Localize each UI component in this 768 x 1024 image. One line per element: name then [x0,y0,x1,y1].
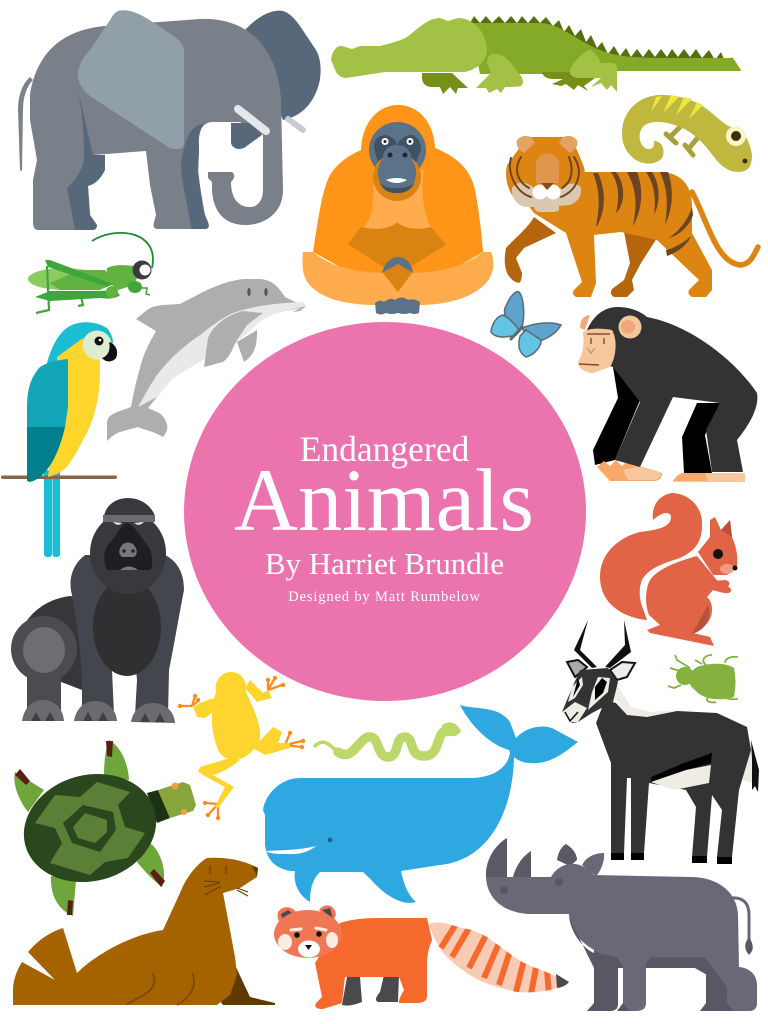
icon: gorilla [11,498,184,723]
icon: macaw [1,322,117,557]
designer credit: Designed by Matt Rumbelow [288,589,481,605]
heading: Endangered: Endangered [300,429,470,469]
title: Animals: Animals [234,452,534,550]
icon: turtle [12,740,196,916]
icon: snake [315,722,461,757]
icon: antelope [562,620,759,864]
icon: beetle [668,655,738,702]
icon: gecko [622,95,752,172]
icon: orangutan [302,105,493,314]
icon: butterfly [491,292,561,357]
icon: frog [178,672,305,820]
icon: whale [263,705,578,903]
icon: crocodile [331,16,741,94]
orangutan face [369,122,426,201]
icon: red panda [274,905,569,1009]
icon: elephant [18,10,321,230]
icon: squirrel [600,493,738,646]
icon: grasshopper [28,233,153,313]
icon: chimpanzee [578,307,757,482]
author line: By Harriet Brundle [265,546,504,581]
icon: dolphin [107,279,306,441]
icon: rhino [486,838,757,1011]
icon: sea lion [13,858,275,1005]
perch [1,476,117,479]
panel: title circle [184,322,586,701]
icon: tiger [505,136,758,297]
